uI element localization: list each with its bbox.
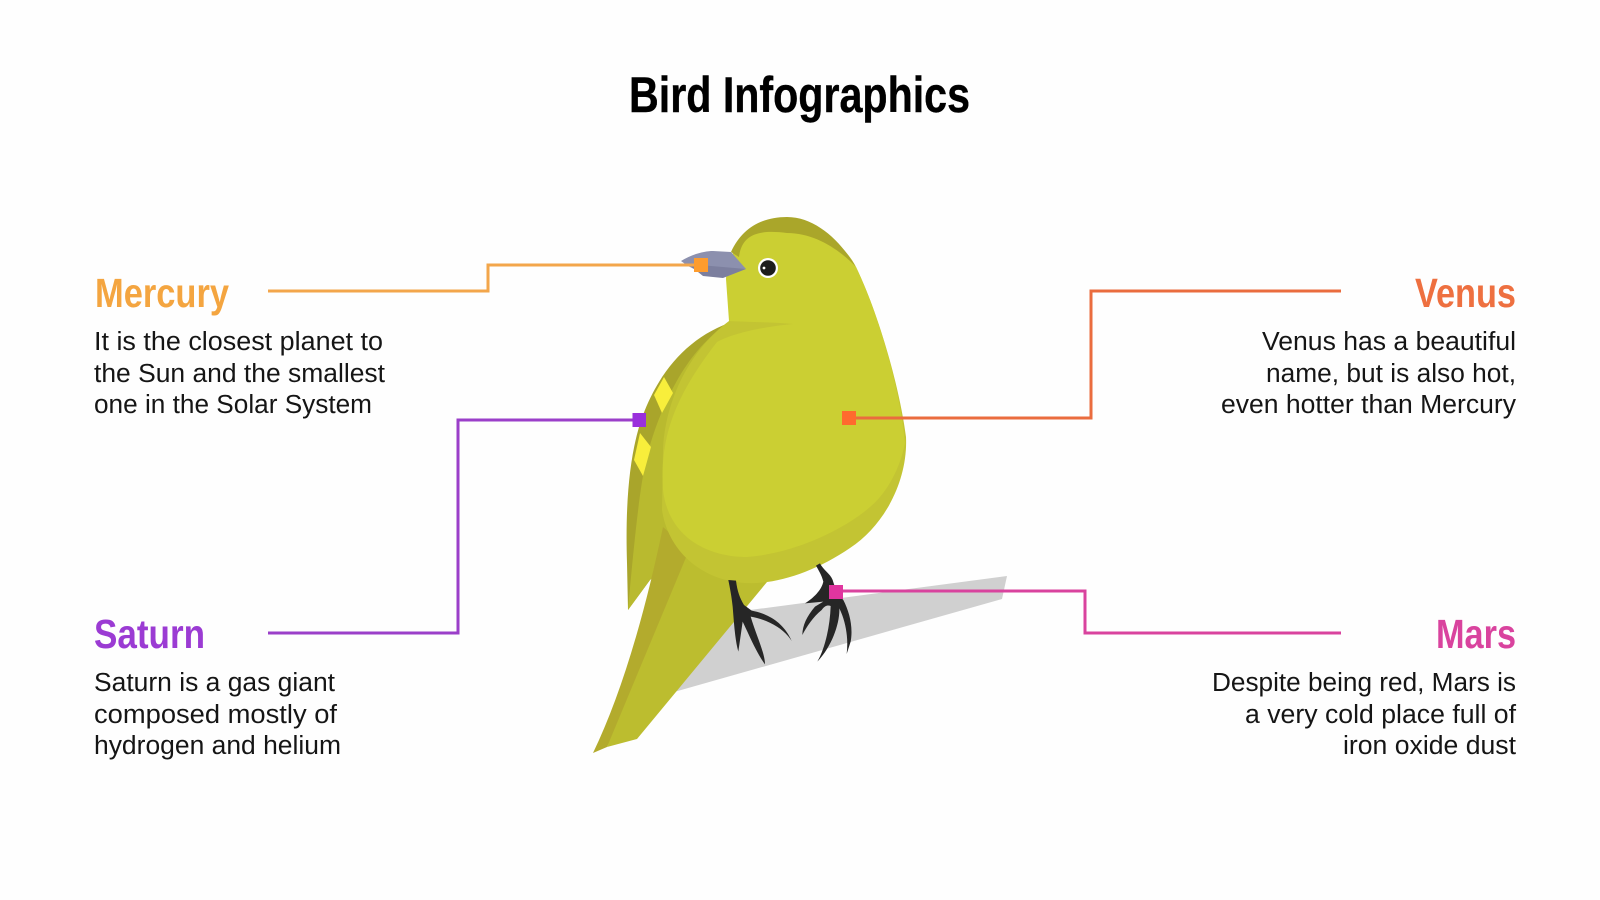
text: Venus description xyxy=(1221,328,1516,419)
marker: Venus xyxy=(842,411,856,425)
connector: Venus xyxy=(842,291,1341,425)
text: Saturn description: hydrogen and helium xyxy=(94,732,341,760)
text: Saturn description: Saturn is a gas giant xyxy=(94,669,335,697)
marker: Saturn xyxy=(632,413,646,427)
branch shadow xyxy=(660,576,1007,696)
panel: Saturn xyxy=(94,611,341,760)
connector: Mercury xyxy=(268,258,708,291)
text: Mercury description xyxy=(94,328,385,419)
text: Mercury description: the Sun and the smallest xyxy=(94,360,385,388)
text: Mars description: iron oxide dust xyxy=(1343,732,1516,760)
wing xyxy=(627,321,735,610)
text: Venus description: even hotter than Mercury xyxy=(1221,391,1516,419)
text: Mercury description: It is the closest planet to xyxy=(94,328,383,356)
crest xyxy=(731,217,856,267)
heading: Venus: Venus xyxy=(1415,270,1516,316)
eye xyxy=(758,258,778,278)
body shade xyxy=(662,267,906,583)
title: Bird Infographics xyxy=(629,67,970,123)
tail xyxy=(593,527,767,753)
heading: Mercury: Mercury xyxy=(95,270,229,316)
panel: Venus xyxy=(1221,270,1516,419)
feet xyxy=(728,563,852,664)
text: Saturn description xyxy=(94,669,341,760)
panel: Mars xyxy=(1212,611,1517,760)
heading: Saturn: Saturn xyxy=(94,611,205,657)
panel: Mercury xyxy=(94,270,385,419)
text: Mars description: Despite being red, Mars is xyxy=(1212,669,1516,697)
text: Venus description: Venus has a beautiful xyxy=(1262,328,1516,356)
text: Saturn description: composed mostly of xyxy=(94,701,338,729)
beak xyxy=(681,251,746,278)
marker: Mercury xyxy=(694,258,708,272)
text: Mars description xyxy=(1212,669,1517,760)
text: Mercury description: one in the Solar System xyxy=(94,391,372,419)
connector: Saturn xyxy=(268,413,646,633)
marker: Mars xyxy=(829,585,843,599)
connector: Mars xyxy=(829,585,1341,633)
body and head xyxy=(663,224,905,557)
text: Mars description: a very cold place full of xyxy=(1245,701,1517,729)
text: Venus description: name, but is also hot, xyxy=(1266,360,1516,388)
heading: Mars: Mars xyxy=(1436,611,1516,657)
bird illustration xyxy=(593,217,1007,753)
